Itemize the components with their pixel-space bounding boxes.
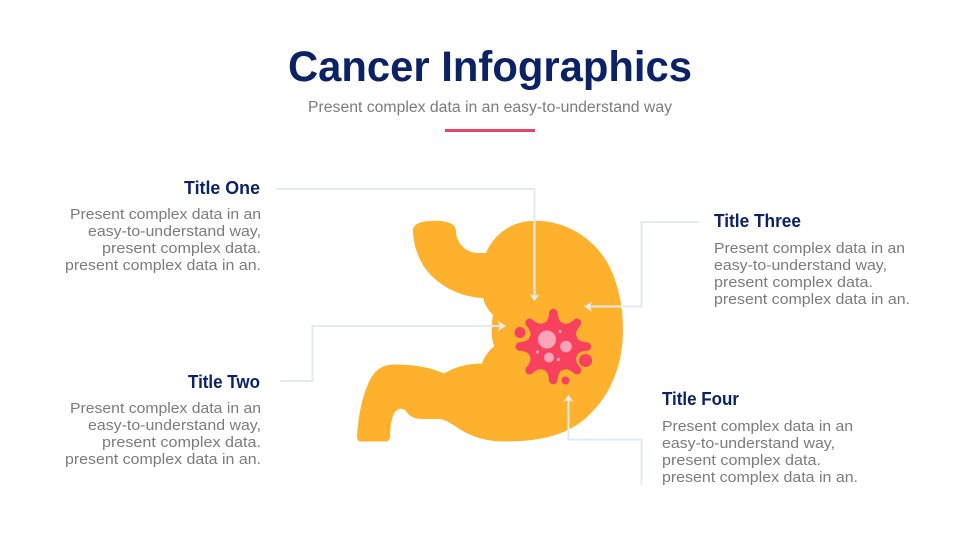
text block: Title One: Present complex data in an: [70, 207, 261, 223]
text block: Title Four: Title Four: [662, 389, 739, 409]
text block: Title Three: Title Three: [714, 211, 801, 231]
text block: Title One: Title One: [184, 178, 260, 198]
text block: Title Four: easy-to-understand way,: [662, 436, 835, 452]
icon: stomach: [357, 221, 623, 442]
connector arrow: Title Three: [584, 222, 698, 312]
text block: Title Three: present complex data.: [714, 275, 873, 291]
text block: Title Four: Present complex data in an: [662, 419, 853, 435]
text block: Title Two: Title Two: [188, 372, 260, 392]
text block: Title Three: present complex data in an.: [714, 292, 910, 308]
text block: Title Four: [662, 389, 858, 486]
text block: Title Two: present complex data in an.: [65, 452, 261, 468]
connector arrow: Title Two: [280, 321, 506, 381]
text block: Title One: easy-to-understand way,: [88, 224, 261, 240]
text block: Title Three: [714, 211, 910, 308]
text block: Title One: present complex data in an.: [65, 258, 261, 274]
text block: Title One: present complex data.: [102, 241, 261, 257]
icon: cancer cell: [514, 309, 592, 384]
text block: Title Four: present complex data in an.: [662, 470, 858, 486]
connector arrow: Title One: [276, 189, 540, 301]
title: Cancer Infographics: [288, 43, 692, 91]
text block: Title Three: Present complex data in an: [714, 241, 905, 257]
text block: Title Four: present complex data.: [662, 453, 821, 469]
accent underline: [445, 129, 535, 132]
connector arrow: Title Four: [564, 395, 642, 485]
text block: Title Two: easy-to-understand way,: [88, 418, 261, 434]
text block: Title One: [65, 178, 261, 274]
text block: Title Two: Present complex data in an: [70, 401, 261, 417]
text block: Title Two: [65, 372, 261, 468]
text block: Title Two: present complex data.: [102, 435, 261, 451]
subtitle: Present complex data in an easy-to-understand way: [308, 99, 672, 116]
text block: Title Three: easy-to-understand way,: [714, 258, 887, 274]
